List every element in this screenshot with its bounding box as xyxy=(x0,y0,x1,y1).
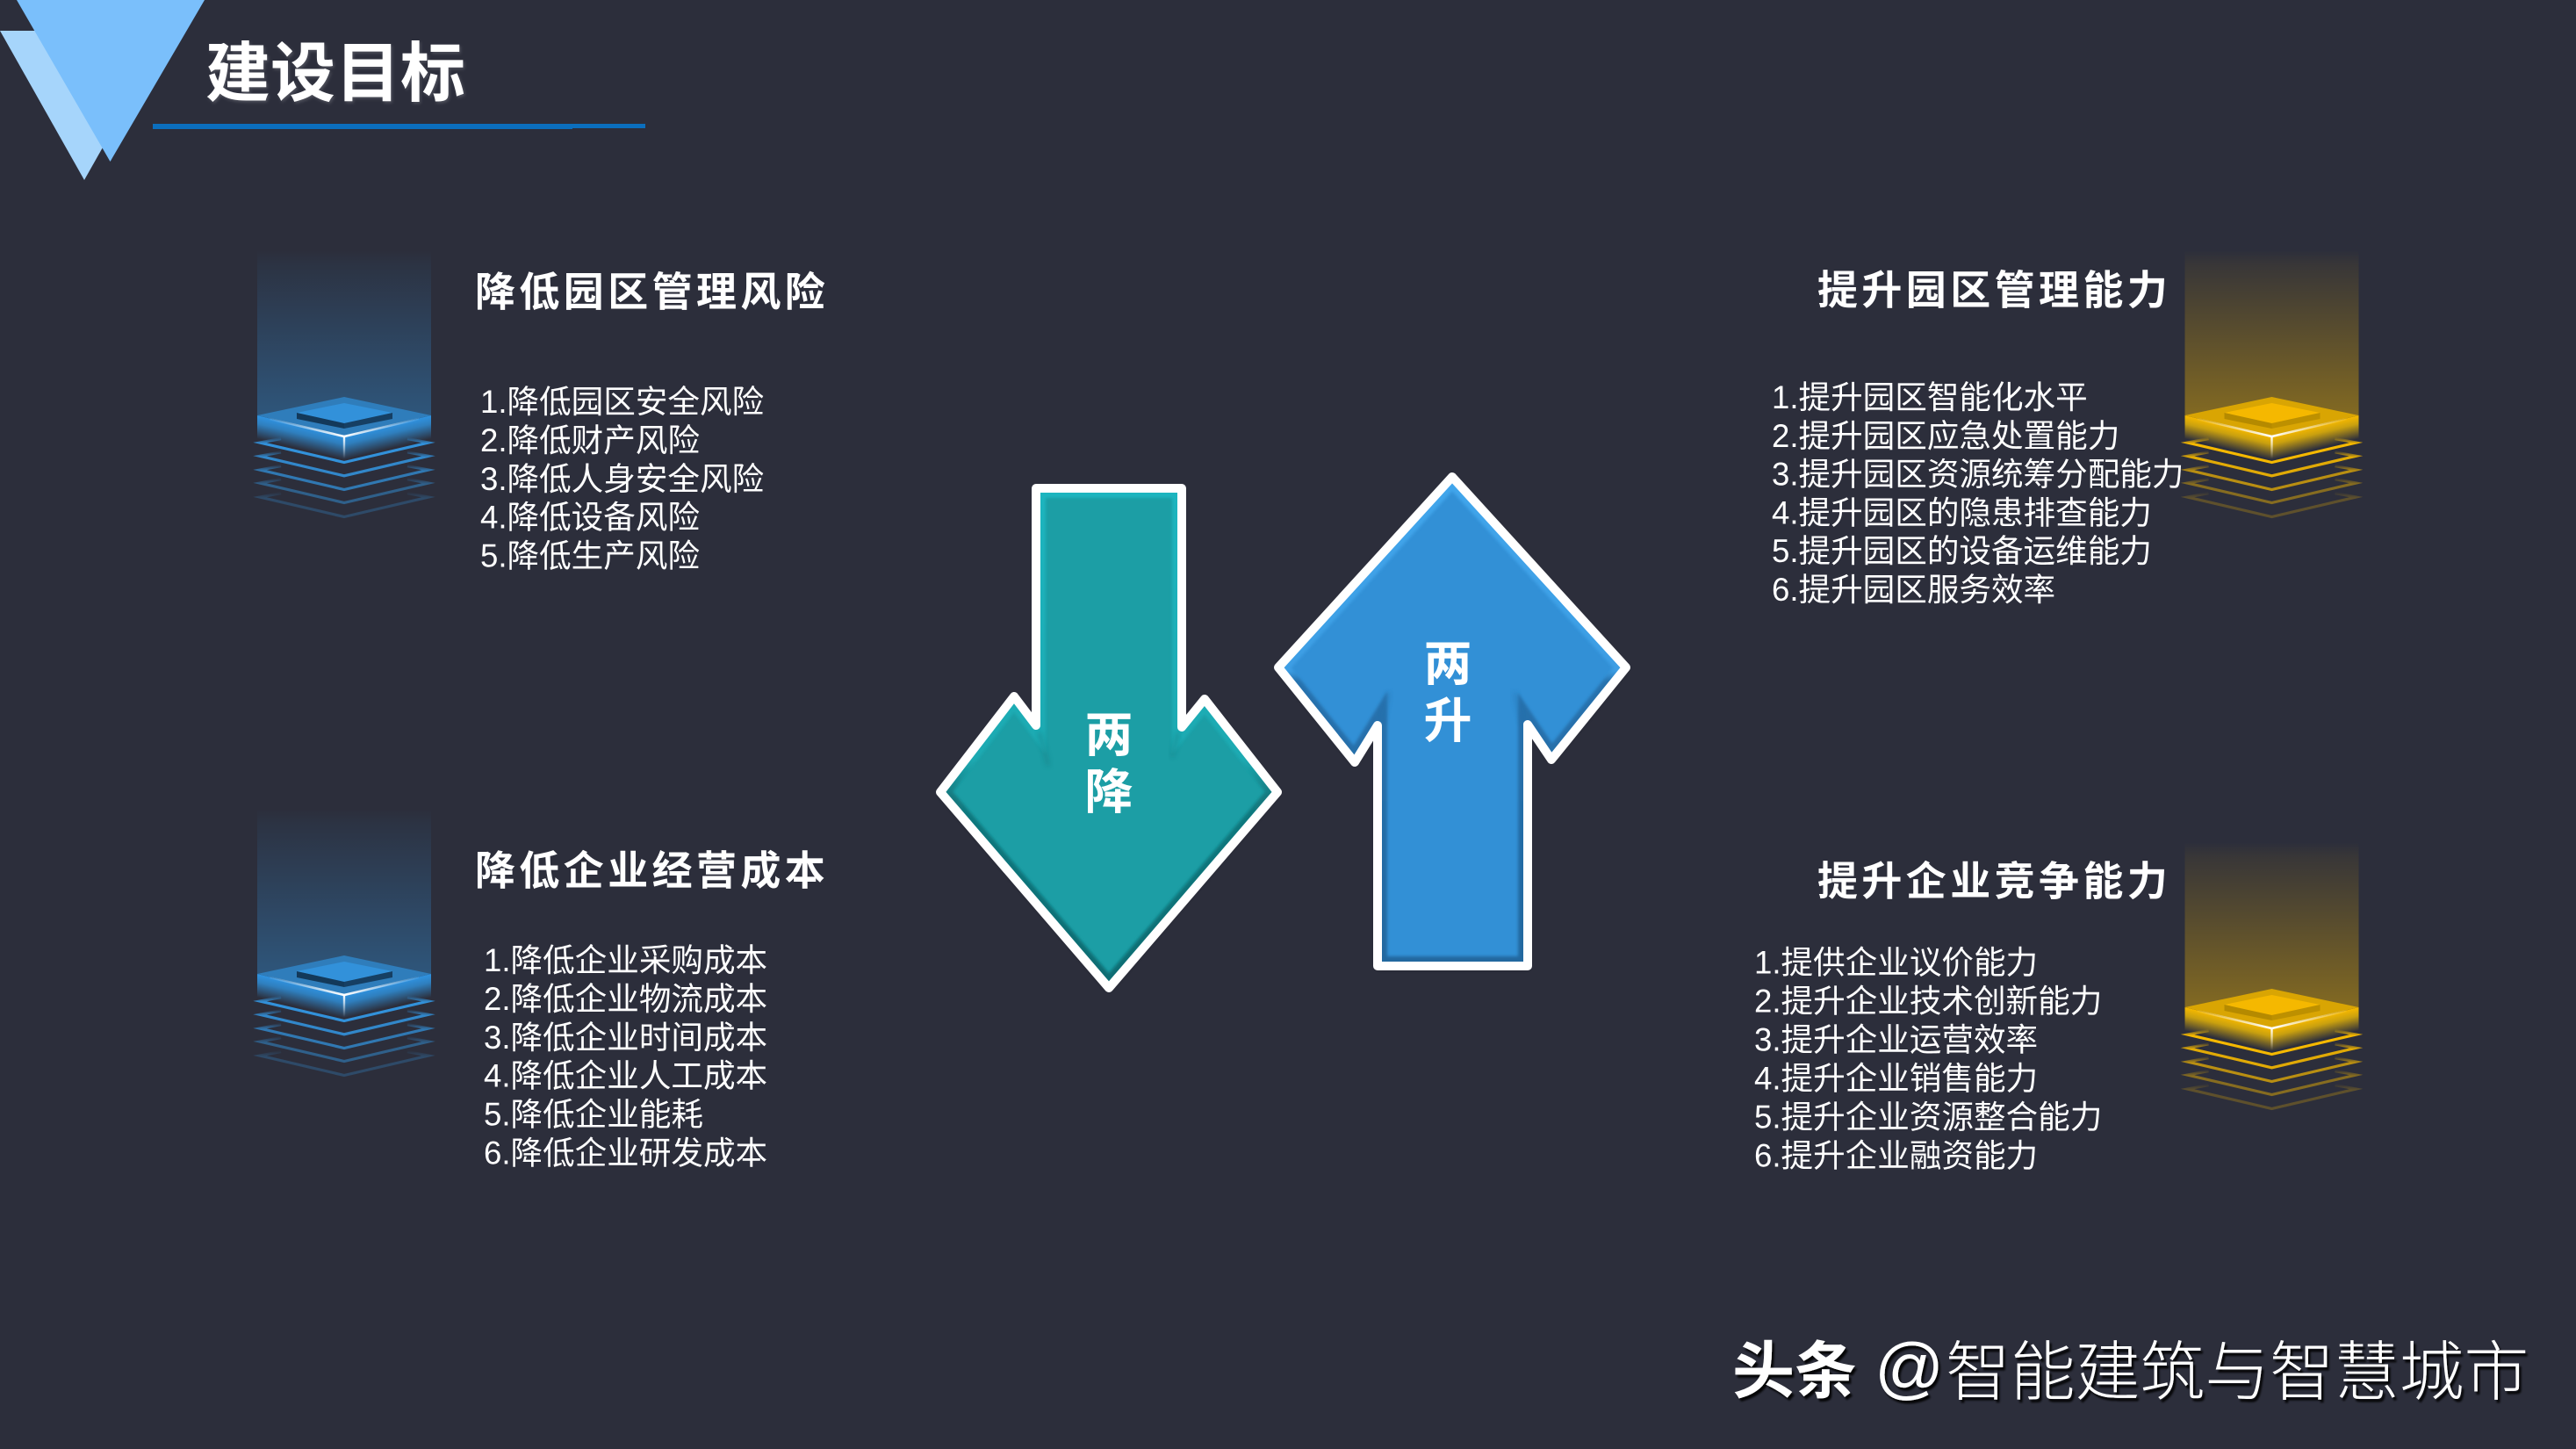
icon: blue platform xyxy=(257,250,431,516)
list: 2.降低企业物流成本 xyxy=(484,981,767,1017)
heading: 降低企业经营成本 xyxy=(475,848,829,894)
list: 5.降低企业能耗 xyxy=(484,1097,703,1133)
panel: improve enterprise competitiveness xyxy=(1754,842,2358,1173)
list xyxy=(480,384,764,574)
list: 6.提升企业融资能力 xyxy=(1754,1138,2038,1173)
list xyxy=(1754,945,2102,1173)
list: 3.提升企业运营效率 xyxy=(1754,1022,2038,1057)
list: 6.降低企业研发成本 xyxy=(484,1135,767,1171)
watermark: 头条 xyxy=(1732,1337,1857,1407)
list: 4.提升园区的隐患排查能力 xyxy=(1772,494,2152,530)
panel: reduce enterprise operating costs xyxy=(257,809,829,1171)
watermark: @ xyxy=(1874,1329,1944,1406)
list: 3.降低人身安全风险 xyxy=(480,461,764,497)
list: 2.提升园区应急处置能力 xyxy=(1772,418,2119,454)
arrow label: 两 xyxy=(1423,637,1472,691)
panel: improve park management capability xyxy=(1772,250,2358,608)
arrow label: 降 xyxy=(1084,765,1133,819)
arrow label xyxy=(1423,637,1472,748)
arrow: two improvements (up) xyxy=(1278,477,1626,966)
watermark xyxy=(1732,1329,2529,1409)
header triangles icon xyxy=(0,0,205,180)
list: 1.降低企业采购成本 xyxy=(484,942,767,978)
title underline xyxy=(153,124,645,129)
list: 3.降低企业时间成本 xyxy=(484,1020,767,1056)
icon: gold platform xyxy=(2184,250,2358,516)
list: 4.降低企业人工成本 xyxy=(484,1058,767,1094)
list: 5.降低生产风险 xyxy=(480,538,700,574)
title: 建设目标 xyxy=(205,37,465,110)
list: 2.提升企业技术创新能力 xyxy=(1754,984,2102,1019)
list: 4.降低设备风险 xyxy=(480,500,700,536)
panel: reduce park management risk xyxy=(257,250,829,574)
heading: 降低园区管理风险 xyxy=(475,269,829,314)
list: 6.提升园区服务效率 xyxy=(1772,572,2055,608)
list xyxy=(1772,379,2184,608)
list: 5.提升企业资源整合能力 xyxy=(1754,1099,2102,1135)
arrow label xyxy=(1084,708,1133,819)
list: 4.提升企业销售能力 xyxy=(1754,1061,2038,1096)
list: 5.提升园区的设备运维能力 xyxy=(1772,533,2152,569)
list: 2.降低财产风险 xyxy=(480,422,700,458)
list: 1.降低园区安全风险 xyxy=(480,384,764,420)
list: 1.提供企业议价能力 xyxy=(1754,945,2038,980)
list xyxy=(484,942,767,1171)
heading: 提升园区管理能力 xyxy=(1817,267,2171,313)
list: 3.提升园区资源统筹分配能力 xyxy=(1772,457,2184,493)
list: 1.提升园区智能化水平 xyxy=(1772,379,2088,415)
icon: blue platform xyxy=(257,809,431,1075)
watermark: 智能建筑与智慧城市 xyxy=(1946,1336,2529,1409)
arrow: two reductions (down) xyxy=(940,488,1277,988)
arrow label: 升 xyxy=(1423,694,1472,748)
arrow label: 两 xyxy=(1084,708,1133,762)
icon: gold platform xyxy=(2184,842,2358,1108)
heading: 提升企业竞争能力 xyxy=(1817,859,2171,905)
